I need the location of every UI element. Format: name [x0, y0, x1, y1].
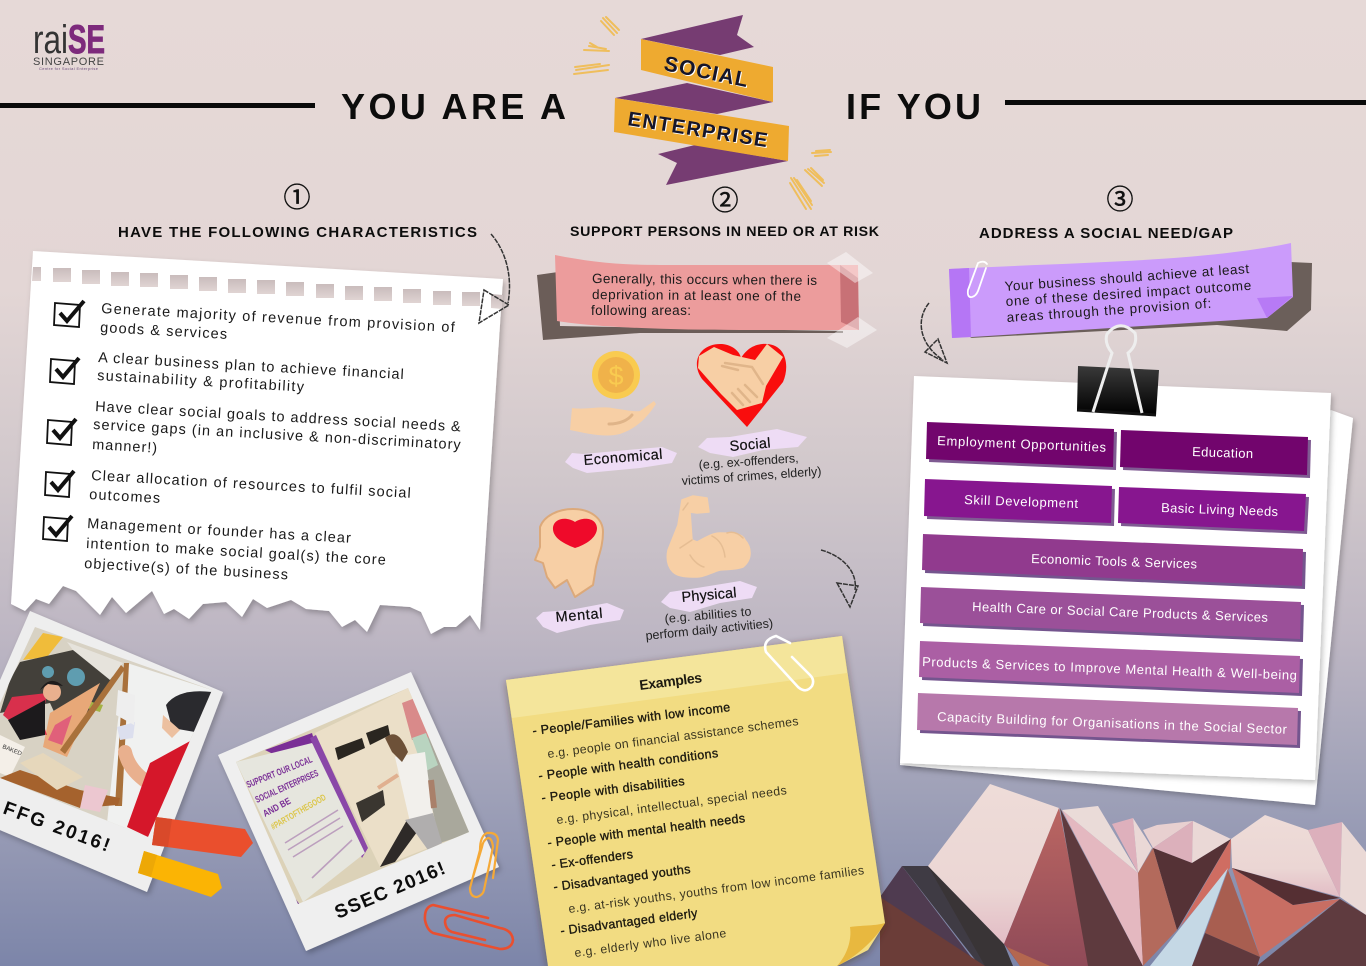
- icon: flexed arm: [667, 496, 750, 577]
- checklist item 1: Generate majority of revenue from provision of: [101, 301, 456, 336]
- icon: coin over hand: $: [608, 361, 624, 391]
- panel: impact outcome front sheet: [900, 376, 1331, 780]
- heading: Examples: Examples: [638, 669, 703, 693]
- icon: gold paperclip: [470, 833, 498, 897]
- callout: purple note on impact outcomes: areas through the provision of:: [1006, 296, 1212, 325]
- logo: raiSE Singapore: Centre for Social Enterprise: [39, 66, 99, 71]
- logo: raiSE Singapore: SE: [68, 18, 105, 62]
- bar: Basic Living Needs: Basic Living Needs: [1161, 500, 1279, 519]
- bar: Skill Development: Skill Development: [964, 492, 1079, 511]
- examples list: e.g. physical, intellectual, special needs: [556, 783, 787, 827]
- sticky tab: orange: [152, 817, 253, 857]
- photo image: exhibition panel: [236, 688, 469, 904]
- callout: pink note on deprivation: Generally, this occurs when there is: [592, 271, 817, 288]
- checklist item 5: Management or founder has a clear: [87, 516, 351, 547]
- ribbon banner: Social Enterprise: SOCIAL: [663, 53, 751, 93]
- checklist item 5: [43, 516, 386, 583]
- bar: Basic Living Needs: [1118, 487, 1309, 534]
- photo image: exhibition panel: #PARTOFTHEGOOD: [269, 792, 328, 832]
- examples list: - People with mental health needs: [547, 811, 746, 850]
- title: YOU ARE A: YOU ARE A: [341, 86, 566, 127]
- icon: white paperclip on purple note: [968, 262, 987, 297]
- photo: SSEC 2016 polaroid: [218, 672, 499, 951]
- icon: white paperclip on sticky note: [765, 636, 813, 690]
- checklist item 5: intention to make social goal(s) the core: [86, 536, 386, 569]
- label: Economical: [565, 447, 677, 473]
- title left rule: [0, 103, 315, 108]
- decorative brush strokes around ribbon: [574, 17, 831, 209]
- label: Economical: Economical: [583, 447, 663, 469]
- checklist item 2: A clear business plan to achieve financial: [98, 350, 404, 383]
- callout: purple note on impact outcomes: Your business should achieve at least: [1004, 261, 1250, 294]
- bar: Health Care or Social Care Products & Services: [920, 587, 1304, 642]
- label: Social: [681, 429, 822, 488]
- photo: FFG 2016 polaroid: [0, 611, 223, 892]
- section 2 heading: SUPPORT PERSONS IN NEED OR AT RISK: [570, 224, 880, 240]
- panel: examples sticky note: [506, 636, 885, 966]
- label: Physical: (e.g. abilities to: [664, 604, 752, 626]
- label: Mental: [536, 603, 624, 633]
- checklist item 3: service gaps (in an inclusive & non-discriminatory: [93, 417, 462, 454]
- checklist item 4: outcomes: [89, 487, 161, 507]
- ribbon banner: Social Enterprise: ENTERPRISE: [626, 108, 769, 152]
- label: Mental: Mental: [555, 606, 603, 626]
- label: Physical: perform daily activities): [645, 616, 774, 643]
- label: Social: Social: [729, 435, 771, 455]
- ribbon banner: Social Enterprise: [614, 15, 789, 185]
- photo image: exhibition panel: AND BE: [261, 796, 293, 820]
- logo: raiSE Singapore: SINGAPORE: [33, 56, 104, 68]
- label: Physical: [645, 581, 774, 643]
- examples list: - Disadvantaged youths: [553, 862, 691, 894]
- panel: back sheet of paper: [900, 410, 1353, 805]
- examples list: - People with disabilities: [541, 774, 685, 805]
- icon: binder clip: [1077, 326, 1159, 415]
- examples list: - People/Families with low income: [532, 700, 731, 738]
- label: Social: victims of crimes, elderly): [681, 464, 822, 488]
- bar: Education: [1120, 430, 1311, 478]
- section 1 heading: HAVE THE FOLLOWING CHARACTERISTICS: [118, 224, 477, 241]
- bar: Health Care or Social Care Products & Services: Health Care or Social Care Products & Services: [972, 599, 1269, 625]
- examples list: - Ex-offenders: [551, 847, 634, 872]
- checklist item 4: Clear allocation of resources to fulfil social: [91, 468, 411, 502]
- photo image: exhibition panel: SOCIAL ENTERPRISES: [254, 768, 320, 806]
- callout: purple note on impact outcomes: one of these desired impact outcome: [1005, 278, 1252, 309]
- callout: pink note on deprivation: deprivation in at least one of the: [592, 287, 801, 304]
- icon: coin over hand: [570, 351, 656, 435]
- examples list: - Disadvantaged elderly: [560, 906, 699, 938]
- checklist item 3: [47, 399, 462, 457]
- ribbon banner: Social Enterprise: ENTERPRISE: [627, 109, 770, 153]
- icon: head with heart: [535, 509, 603, 597]
- checklist item 2: [50, 350, 404, 396]
- bar: Capacity Building for Organisations in the Social Sector: [917, 693, 1301, 748]
- arrow: support to examples: [821, 550, 858, 607]
- photo image: stall scene: BAKED: [1, 744, 23, 758]
- title: IF YOU: IF YOU: [846, 86, 981, 127]
- callout: pink note on deprivation: [537, 252, 877, 348]
- logo: raiSE Singapore: rai: [33, 18, 68, 62]
- photo: FFG 2016 polaroid: FFG 2016!: [0, 798, 113, 857]
- label: Physical: Physical: [681, 585, 737, 606]
- examples list: - People with health conditions: [538, 746, 719, 783]
- checklist item 3: manner!): [92, 437, 158, 457]
- checklist item 2: sustainability & profitability: [97, 368, 305, 396]
- bar: Economic Tools & Services: Economic Tools & Services: [1031, 551, 1198, 572]
- photo image: stall scene: [0, 620, 220, 840]
- section 3 heading: ADDRESS A SOCIAL NEED/GAP: [979, 225, 1233, 242]
- photo image: exhibition panel: SUPPORT OUR LOCAL: [245, 754, 314, 791]
- checklist item 1: goods & services: [100, 320, 227, 343]
- icon: red paperclip: [425, 905, 513, 949]
- ribbon banner: Social Enterprise: SOCIAL: [662, 52, 750, 92]
- logo: raiSE Singapore: [33, 18, 105, 71]
- examples list: [532, 700, 865, 960]
- title right rule: [1005, 100, 1366, 105]
- sticky tab: yellow: [138, 851, 222, 897]
- examples list: e.g. at-risk youths, youths from low income families: [568, 863, 865, 916]
- examples list: e.g. elderly who live alone: [574, 926, 727, 960]
- callout: purple note on impact outcomes: [949, 243, 1312, 338]
- label: Social: (e.g. ex-offenders,: [698, 451, 799, 472]
- photo: SSEC 2016 polaroid: SSEC 2016!: [332, 858, 449, 924]
- bar: Products & Services to Improve Mental Health & Well-being: Products & Services to Improve Mental Health & Well-being: [922, 654, 1297, 683]
- bar: Skill Development: [924, 479, 1115, 526]
- bar: Capacity Building for Organisations in the Social Sector: Capacity Building for Organisations in the Social Sector: [937, 709, 1288, 737]
- checklist item 3: Have clear social goals to address social needs &: [95, 399, 461, 435]
- bar: Employment Opportunities: Employment Opportunities: [937, 433, 1107, 455]
- examples list: e.g. people on financial assistance schemes: [547, 714, 799, 761]
- bar: Economic Tools & Services: [922, 534, 1306, 589]
- arrow: need/gap to list: [921, 303, 947, 363]
- bar: Employment Opportunities: [926, 422, 1117, 470]
- bar: Products & Services to Improve Mental Health & Well-being: [919, 641, 1303, 696]
- icon: handshake heart: [697, 344, 786, 427]
- bar: Education: Education: [1192, 444, 1253, 461]
- panel: characteristics torn paper: [11, 251, 503, 634]
- section 1 number: ①: [284, 183, 310, 213]
- checklist item 5: objective(s) of the business: [84, 556, 288, 583]
- callout: pink note on deprivation: following areas:: [591, 303, 691, 318]
- section 3 number: ③: [1106, 185, 1134, 215]
- mountains illustration: [880, 784, 1366, 966]
- section 2 number: ②: [712, 186, 738, 216]
- arrow: characteristics to support: [479, 234, 509, 323]
